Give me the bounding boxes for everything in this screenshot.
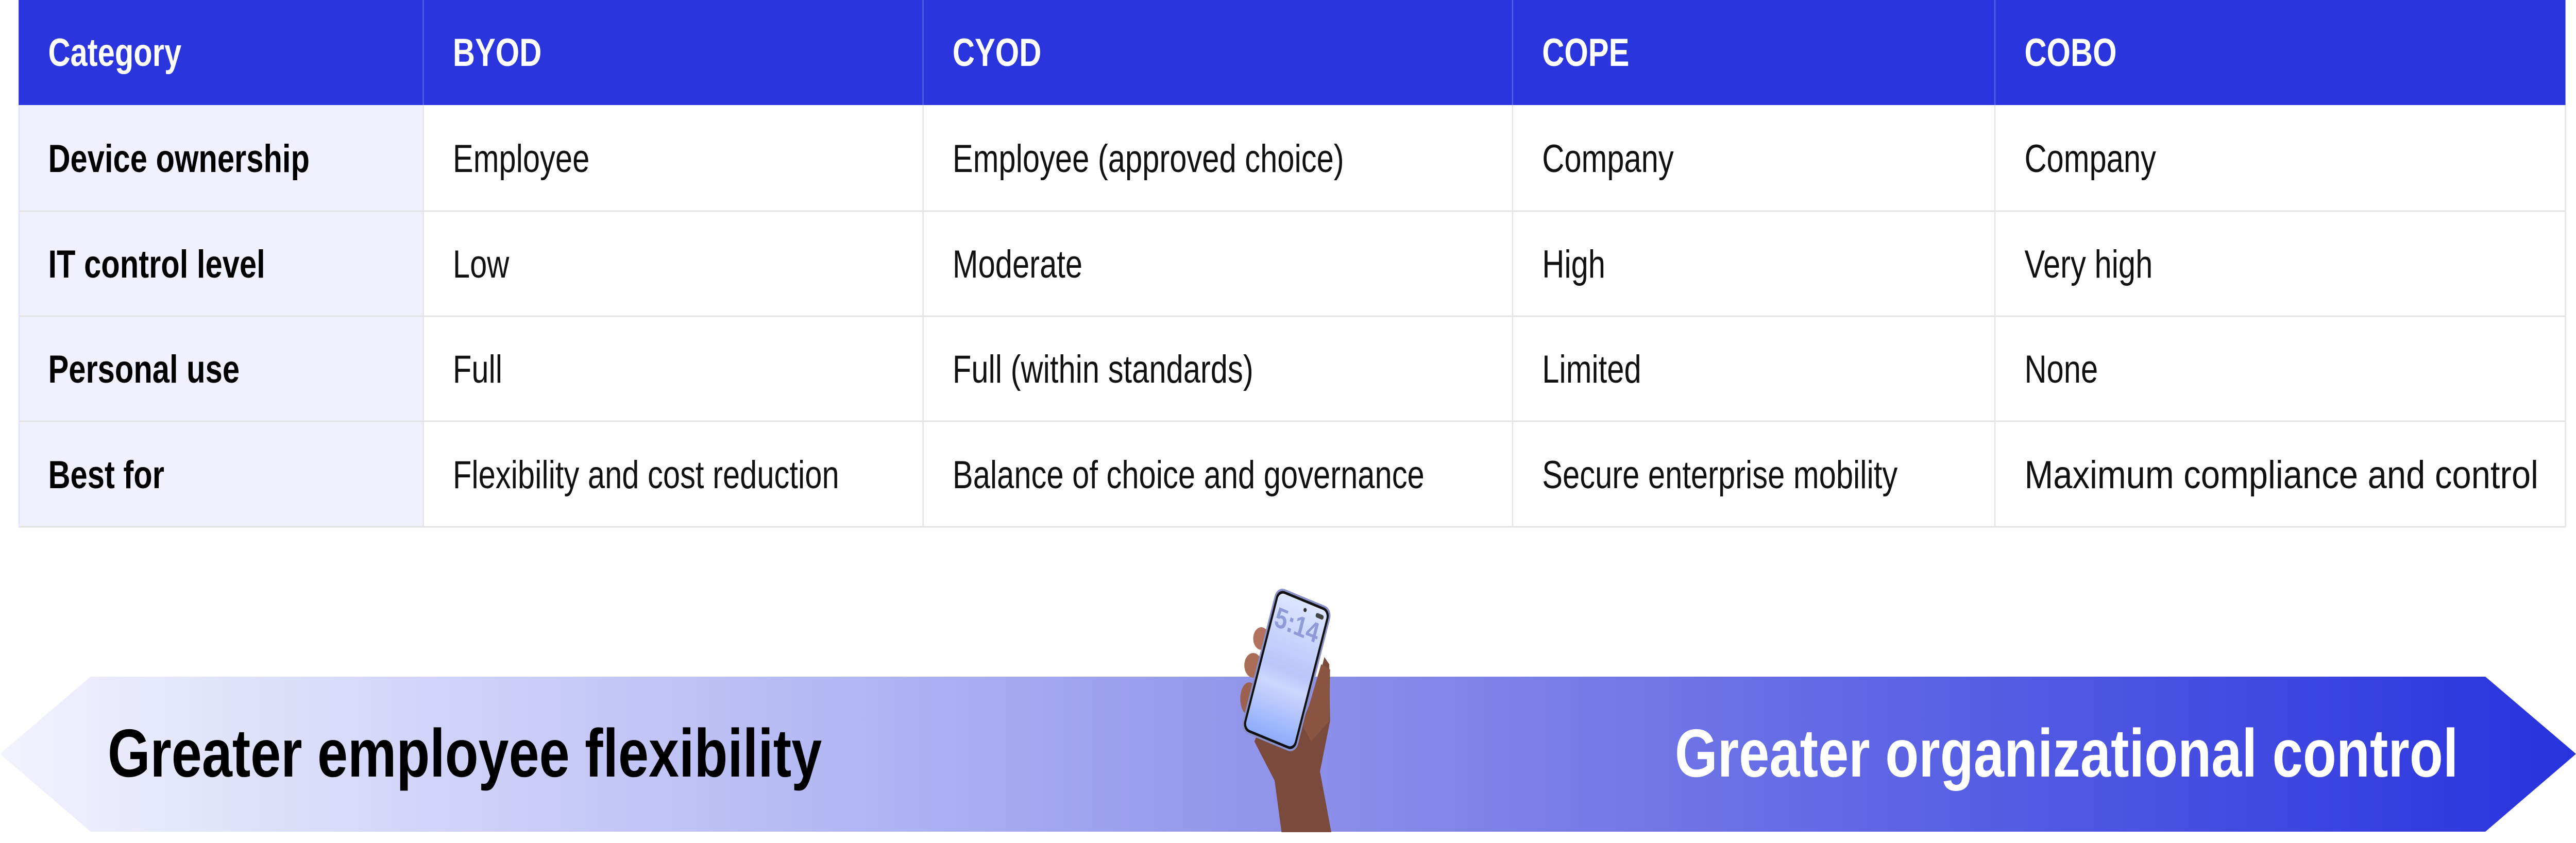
row headers: IT control level xyxy=(48,243,265,286)
column: COBO xyxy=(2024,137,2538,497)
label: greater organizational control: Greater organizational control xyxy=(1675,716,2458,792)
header row: CYOD xyxy=(953,31,1041,75)
column: COPE xyxy=(1542,137,1898,497)
column: CYOD: Employee (approved choice) xyxy=(953,137,1344,181)
column: CYOD: Moderate xyxy=(953,243,1082,286)
column: COPE: Limited xyxy=(1542,348,1641,391)
column: BYOD: Flexibility and cost reduction xyxy=(453,453,839,497)
column: CYOD: Balance of choice and governance xyxy=(953,453,1425,497)
arrow: bidirectional spectrum bar xyxy=(0,677,2576,832)
header row: BYOD xyxy=(453,31,541,75)
label: greater employee flexibility: Greater employee flexibility xyxy=(108,716,822,792)
column: COPE: High xyxy=(1542,243,1605,286)
icon: hand holding phone: 5:14 xyxy=(1272,600,1323,649)
column: CYOD xyxy=(953,137,1425,497)
header row: COPE xyxy=(1542,31,1629,75)
column: COBO: Maximum compliance and control xyxy=(2024,453,2538,497)
column: BYOD: Low xyxy=(453,243,510,286)
column: COPE: Secure enterprise mobility xyxy=(1542,453,1898,497)
comparison table xyxy=(19,0,2566,527)
icon: hand holding phone xyxy=(1240,586,1333,832)
header row: COBO xyxy=(2024,31,2117,75)
column: COBO: Very high xyxy=(2024,243,2153,286)
row headers: Device ownership xyxy=(48,137,310,181)
column: BYOD: Employee xyxy=(453,137,589,181)
header row xyxy=(19,0,2566,105)
column: COBO: Company xyxy=(2024,137,2157,181)
column: COBO: None xyxy=(2024,348,2098,391)
column: CYOD: Full (within standards) xyxy=(953,348,1253,391)
header row: Category xyxy=(48,31,181,75)
column: COPE: Company xyxy=(1542,137,1674,181)
column: BYOD: Full xyxy=(453,348,502,391)
row headers: Best for xyxy=(48,453,164,497)
row headers: Personal use xyxy=(48,348,240,391)
column: BYOD xyxy=(453,137,839,497)
row headers xyxy=(48,137,310,497)
